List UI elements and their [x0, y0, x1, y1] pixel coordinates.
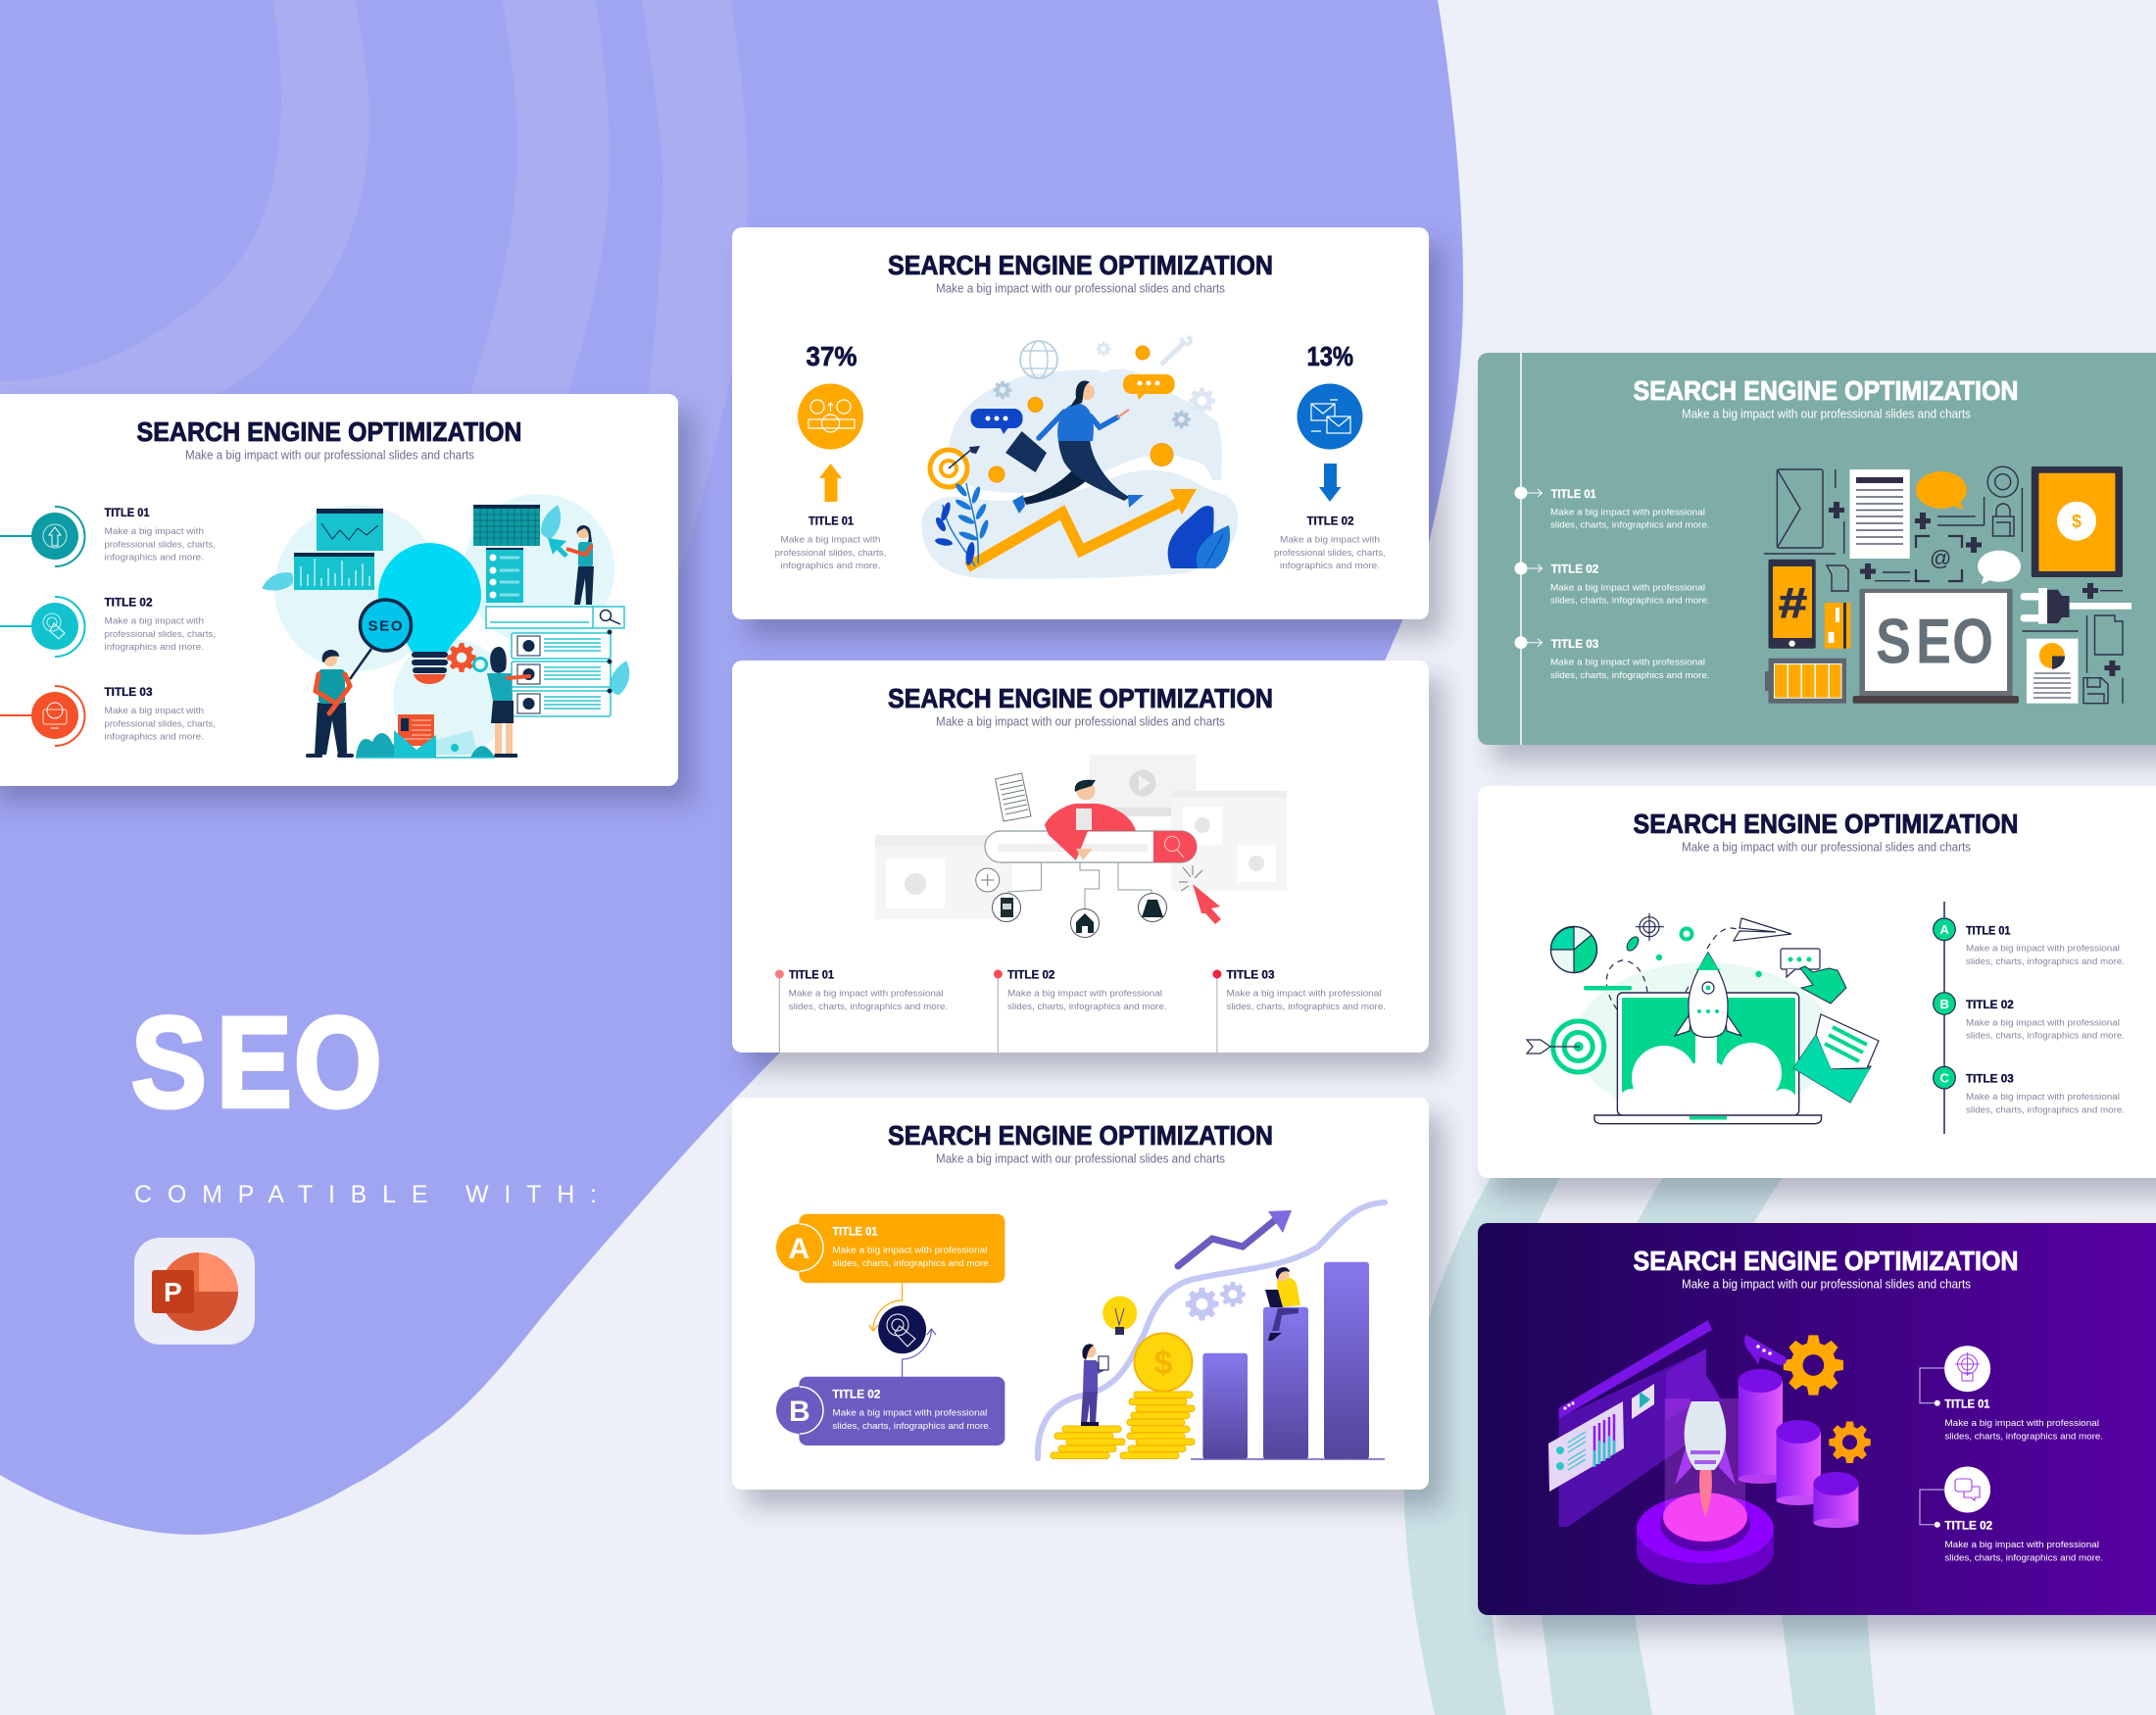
illustration: SEO icon flat lay	[1764, 466, 2132, 704]
result rows	[512, 633, 611, 716]
orange card	[1825, 603, 1850, 649]
option B: TITLE 02	[832, 1388, 881, 1401]
slide subtitle: Make a big impact with our professional slides and charts	[1682, 841, 1971, 855]
purple blob	[0, 0, 1463, 1535]
lettered timeline: C	[1940, 1070, 1950, 1086]
slide title: SEARCH ENGINE OPTIMIZATION	[1633, 808, 2019, 839]
data card	[1548, 1401, 1624, 1492]
man	[1045, 780, 1136, 860]
stat 37%: Make a big impact with	[780, 535, 880, 546]
timeline: slides, charts, infographics and more.	[1550, 520, 1709, 531]
option B: Make a big impact with professional	[832, 1408, 987, 1419]
option B: B	[789, 1396, 810, 1428]
option A: TITLE 01	[832, 1225, 878, 1239]
woman at results	[487, 647, 529, 758]
panel: slide rocket laptop	[1478, 786, 2156, 1196]
man with magnifier: SEO	[368, 617, 403, 635]
man with magnifier	[306, 600, 412, 758]
slide title: SEARCH ENGINE OPTIMIZATION	[1633, 1246, 2019, 1276]
lettered timeline: Make a big impact with professional	[1966, 1017, 2120, 1028]
timeline: slides, charts, infographics and more.	[1550, 596, 1709, 607]
item 02: professional slides, charts,	[104, 629, 216, 640]
item 02: Make a big impact with	[104, 615, 204, 627]
battery	[1765, 659, 1846, 704]
item 01	[0, 506, 216, 566]
option A: Make a big impact with professional	[832, 1246, 987, 1256]
item 01: professional slides, charts,	[104, 539, 216, 550]
target	[930, 446, 980, 487]
bar chart illustration	[1038, 1202, 1385, 1459]
person on bar	[1265, 1267, 1300, 1341]
steps: TITLE 03	[1227, 968, 1275, 982]
slide subtitle: Make a big impact with our professional slides and charts	[936, 282, 1225, 296]
rocket	[1675, 1376, 1736, 1517]
crosshair	[1636, 913, 1664, 941]
plug	[2021, 588, 2132, 624]
heading: SEO: SEO	[131, 991, 381, 1135]
steps: slides, charts, infographics and more.	[1227, 1002, 1386, 1012]
item 02: slides, charts, infographics and more.	[1944, 1552, 2103, 1563]
timeline: Make a big impact with professional	[1550, 507, 1705, 517]
slide subtitle: Make a big impact with our professional slides and charts	[936, 715, 1225, 729]
item 01: TITLE 01	[104, 506, 150, 519]
illustration: search bar man	[875, 755, 1287, 937]
slide subtitle: Make a big impact with our professional slides and charts	[936, 1152, 1225, 1166]
slide subtitle: Make a big impact with our professional slides and charts	[1682, 1278, 1971, 1292]
lettered timeline: TITLE 02	[1966, 998, 2014, 1011]
item 02	[0, 596, 216, 657]
lettered timeline: slides, charts, infographics and more.	[1966, 956, 2125, 967]
gears	[1784, 1335, 1871, 1463]
tablet: $	[2072, 512, 2082, 531]
stat 37%	[775, 341, 886, 571]
illustration: bulb and SEO team	[262, 494, 639, 758]
stat 13%	[1274, 341, 1386, 571]
illustration: isometric rocket	[1548, 1320, 1871, 1585]
growth arrow	[967, 489, 1197, 567]
item 03: professional slides, charts,	[104, 718, 216, 729]
report	[2027, 639, 2078, 704]
teal bands	[1404, 1166, 1911, 1715]
panel: slide teal circles	[0, 394, 693, 804]
item 02: Make a big impact with professional	[1944, 1540, 2099, 1550]
panel: slide A/B bars	[732, 1098, 1444, 1507]
target with arrow	[1527, 1021, 1604, 1072]
timeline: TITLE 02	[1551, 562, 1599, 575]
timeline: Make a big impact with professional	[1550, 582, 1705, 593]
panel: slide search bar	[732, 661, 1444, 1070]
stat 37%: professional slides, charts,	[775, 548, 886, 559]
item 01	[1920, 1346, 2103, 1442]
option A: A	[788, 1233, 809, 1265]
lettered timeline: TITLE 01	[1966, 923, 2011, 937]
item 01: infographics and more.	[104, 553, 204, 564]
gears	[447, 643, 486, 672]
item 02: TITLE 02	[1944, 1519, 1992, 1533]
stat 13%: TITLE 02	[1307, 514, 1354, 528]
option B	[776, 1377, 1004, 1446]
plants and envelope	[356, 714, 495, 758]
wave bands	[0, 0, 748, 608]
bar chart illustration: $	[1154, 1345, 1172, 1382]
chat bubble	[1781, 949, 1846, 1004]
rocket	[1675, 953, 1741, 1037]
document	[1850, 469, 1910, 559]
steps: Make a big impact with professional	[1227, 989, 1382, 1000]
connectors	[1007, 862, 1152, 909]
plants	[934, 482, 1230, 568]
slide title: SEARCH ENGINE OPTIMIZATION	[888, 1120, 1273, 1151]
lettered timeline: slides, charts, infographics and more.	[1966, 1104, 2125, 1115]
item 03: TITLE 03	[104, 685, 153, 699]
item 02	[1920, 1466, 2103, 1563]
icon: PowerPoint	[134, 1238, 255, 1345]
panel: slide flat icons	[1478, 353, 2156, 762]
lettered timeline: slides, charts, infographics and more.	[1966, 1031, 2125, 1042]
slide subtitle: Make a big impact with our professional slides and charts	[185, 449, 474, 463]
panel: slide isometric dark	[1478, 1223, 2156, 1633]
woman with arrow	[548, 525, 594, 605]
bulb	[1102, 1296, 1137, 1335]
slide title: SEARCH ENGINE OPTIMIZATION	[137, 416, 521, 447]
stat 13%: infographics and more.	[1280, 561, 1380, 571]
option A	[776, 1214, 1004, 1283]
text: compatible with: COMPATIBLE WITH:	[134, 1181, 597, 1208]
item 02: TITLE 02	[104, 596, 153, 610]
slide title: SEARCH ENGINE OPTIMIZATION	[1633, 375, 2019, 406]
option B: slides, charts, infographics and more.	[832, 1421, 991, 1432]
item 01: TITLE 01	[1944, 1397, 1990, 1411]
timeline: Make a big impact with professional	[1550, 658, 1705, 668]
stat 37%: 37%	[806, 341, 858, 371]
lettered timeline: B	[1940, 997, 1949, 1011]
item 03: infographics and more.	[104, 732, 204, 743]
play card	[1632, 1384, 1654, 1419]
search bar	[486, 607, 624, 628]
tablet	[2032, 466, 2123, 577]
slide title: SEARCH ENGINE OPTIMIZATION	[888, 250, 1273, 280]
timeline: TITLE 01	[1551, 487, 1596, 501]
stat 37%: infographics and more.	[780, 561, 880, 571]
steps	[775, 968, 1386, 1053]
speech bubble	[1744, 1335, 1787, 1365]
person with tablet	[1081, 1344, 1108, 1426]
search bar	[985, 831, 1197, 862]
pie chart	[1550, 927, 1597, 972]
laptop with SEO	[1853, 589, 2019, 704]
illustration: runner on growth arrow	[921, 336, 1238, 579]
option A: slides, charts, infographics and more.	[832, 1258, 991, 1269]
timeline	[1515, 353, 1709, 745]
light beam	[1665, 1398, 1745, 1541]
steps: TITLE 02	[1007, 968, 1055, 982]
item 03: Make a big impact with	[104, 706, 204, 716]
item 03	[0, 685, 216, 746]
phone: #	[1779, 579, 1807, 627]
laptop	[1594, 993, 1821, 1124]
slide subtitle: Make a big impact with our professional slides and charts	[1682, 408, 1971, 421]
icon: PowerPoint: P	[164, 1277, 182, 1307]
illustration: rocket from laptop	[1527, 913, 1879, 1124]
stat 13%: professional slides, charts,	[1274, 548, 1386, 559]
lettered timeline: Make a big impact with professional	[1966, 944, 2120, 955]
connector icon	[869, 1283, 936, 1377]
steps: Make a big impact with professional	[789, 989, 944, 1000]
lettered timeline: A	[1940, 922, 1950, 937]
panel: slide percentages	[732, 227, 1444, 637]
item 02: infographics and more.	[104, 642, 204, 653]
coins	[1051, 1333, 1195, 1458]
illustration: SEO icon flat lay: @	[1930, 546, 1951, 570]
item 01: Make a big impact with professional	[1944, 1418, 2099, 1429]
steps: Make a big impact with professional	[1007, 989, 1162, 1000]
cylinders	[1738, 1369, 1858, 1528]
slide title: SEARCH ENGINE OPTIMIZATION	[888, 683, 1273, 713]
stat 13%: Make a big impact with	[1280, 535, 1380, 546]
cursor	[1179, 865, 1221, 924]
lettered timeline: TITLE 03	[1966, 1072, 2014, 1086]
paper plane	[1734, 918, 1791, 941]
steps: slides, charts, infographics and more.	[789, 1002, 948, 1012]
stat 37%: TITLE 01	[808, 514, 854, 528]
runner	[1012, 381, 1144, 514]
lettered timeline: Make a big impact with professional	[1966, 1092, 2120, 1102]
item 01: Make a big impact with	[104, 526, 204, 537]
item 01: slides, charts, infographics and more.	[1944, 1431, 2103, 1442]
envelope	[1793, 1014, 1879, 1102]
timeline: TITLE 03	[1551, 637, 1599, 651]
phone	[1768, 560, 1816, 649]
laptop with SEO: SEO	[1876, 606, 1993, 677]
stat 13%: 13%	[1307, 341, 1353, 371]
lettered timeline	[1934, 902, 2125, 1134]
steps: slides, charts, infographics and more.	[1007, 1002, 1166, 1012]
steps: TITLE 01	[789, 968, 834, 982]
platform	[1637, 1493, 1774, 1585]
timeline: slides, charts, infographics and more.	[1550, 670, 1709, 681]
